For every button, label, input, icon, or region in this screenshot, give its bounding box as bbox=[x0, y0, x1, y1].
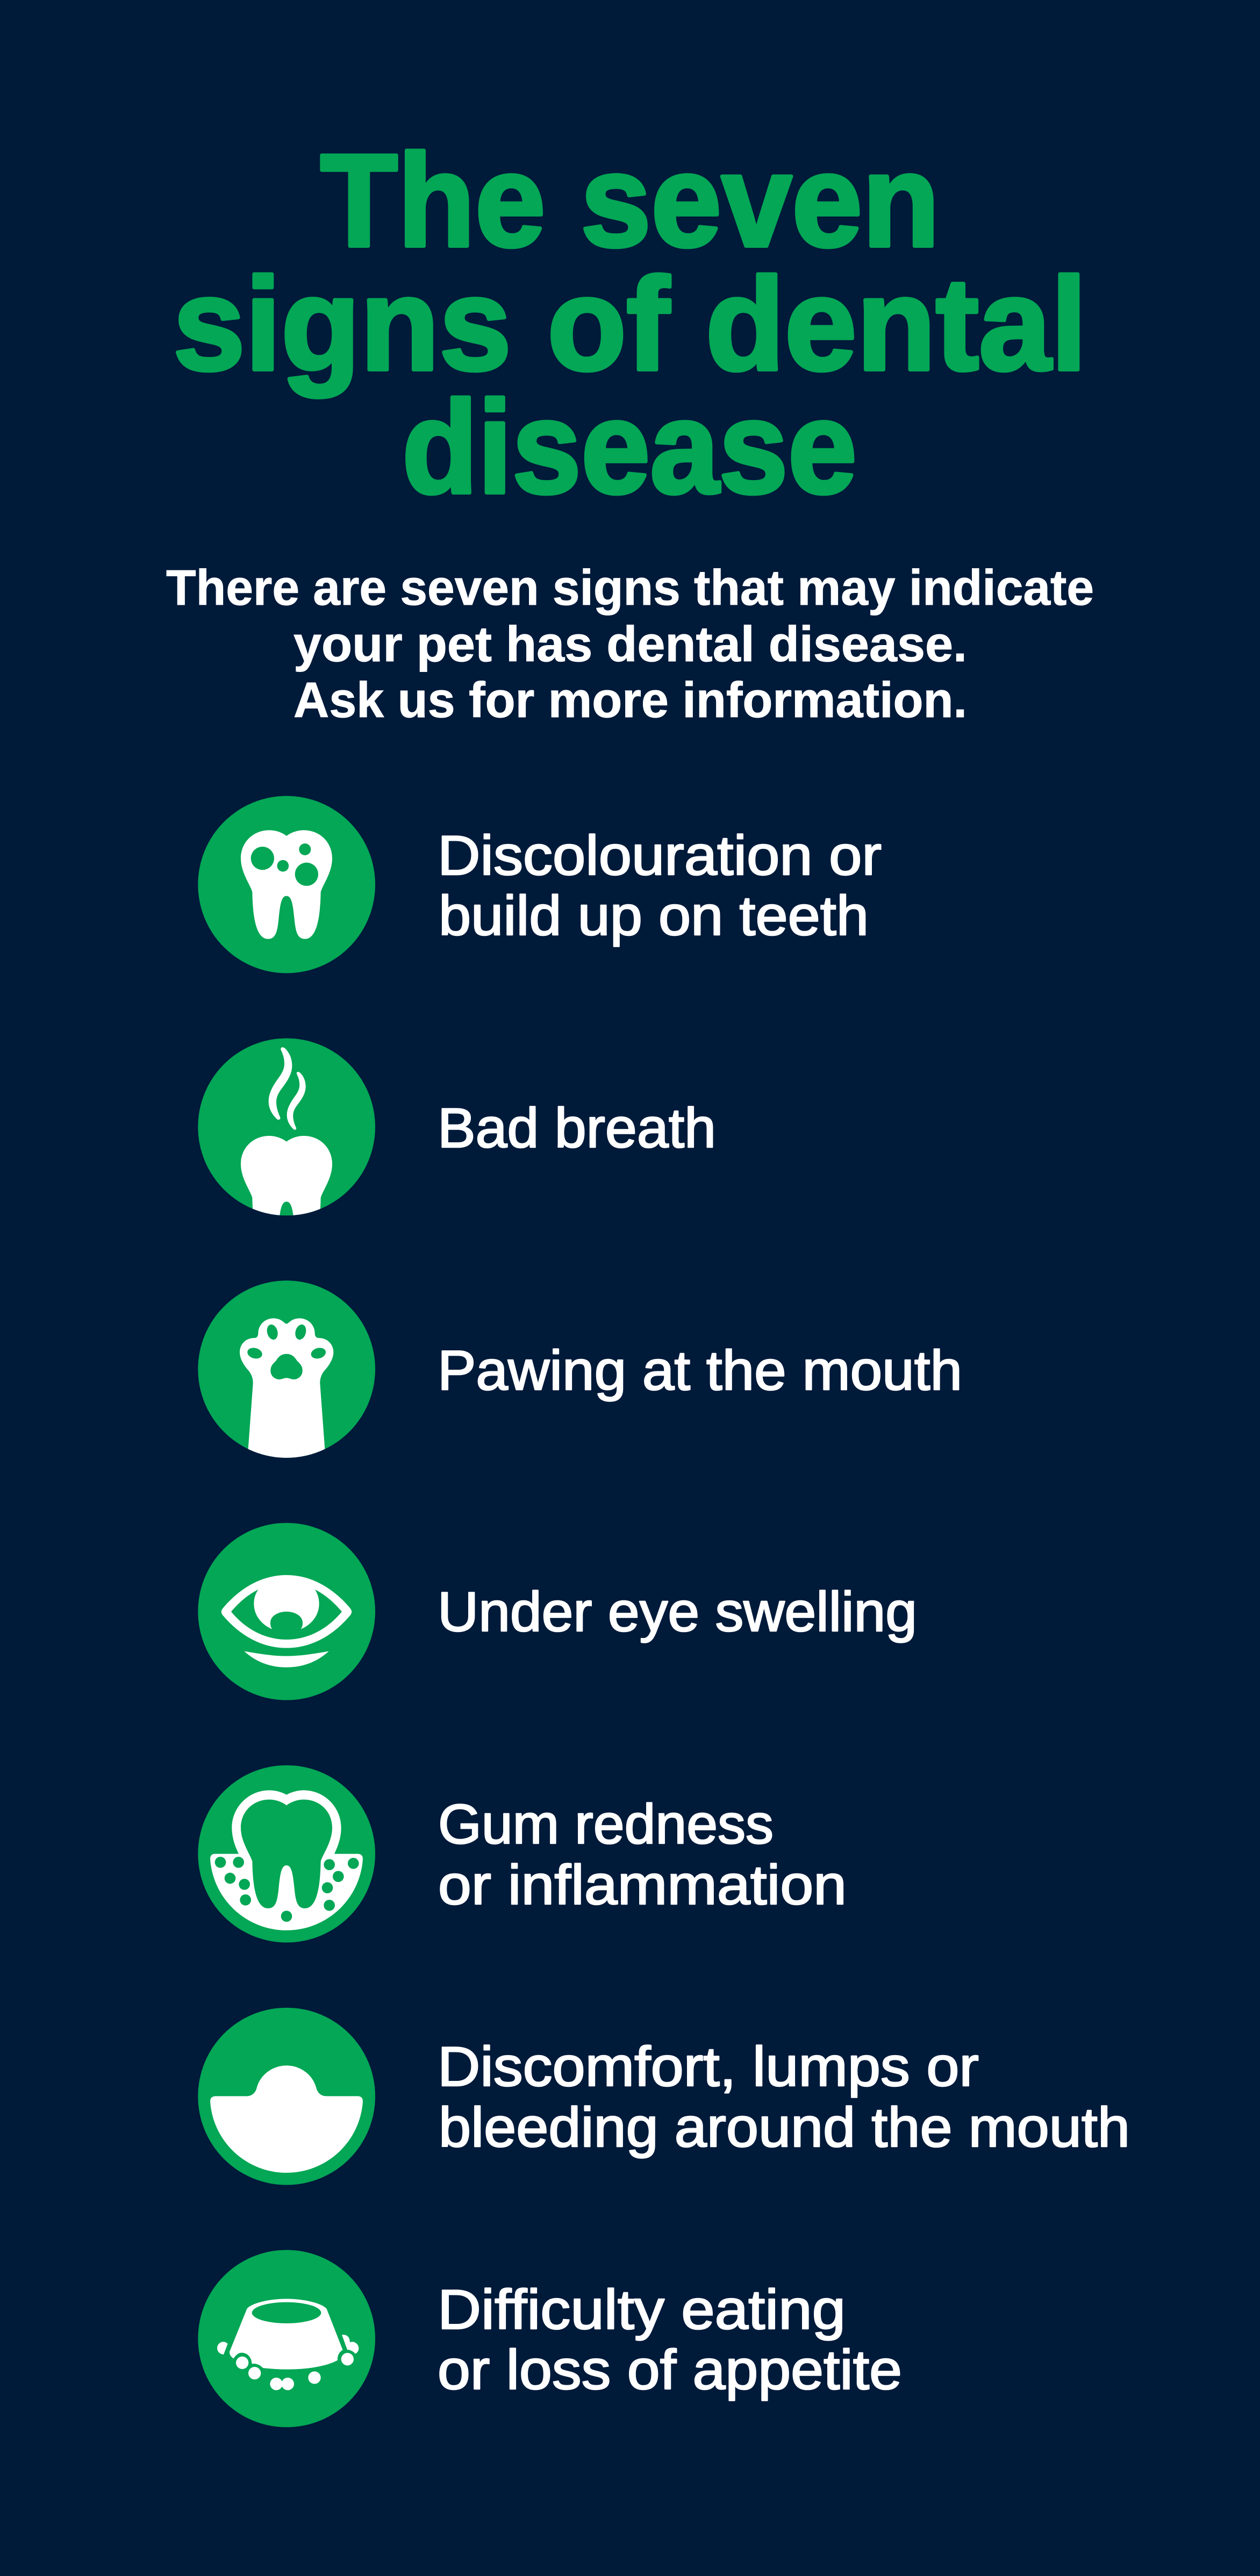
title: signs of dental bbox=[173, 251, 1087, 398]
icon: tooth with spots bbox=[198, 796, 375, 973]
intro text: your pet has dental disease. bbox=[293, 616, 967, 672]
intro text: There are seven signs that may indicate bbox=[166, 560, 1094, 616]
intro text: Ask us for more information. bbox=[293, 672, 967, 728]
icon: raised paw bbox=[198, 1280, 375, 1458]
title: The seven bbox=[320, 127, 940, 274]
label: discomfort: bleeding around the mouth bbox=[439, 2096, 1130, 2159]
label: discomfort: Discomfort, lumps or bbox=[438, 2036, 979, 2098]
icon: mouth lump bbox=[198, 2008, 375, 2185]
label: under eye swelling: Under eye swelling bbox=[438, 1581, 917, 1643]
panel: gum redness sign bbox=[198, 1765, 847, 1942]
label: discolouration: build up on teeth bbox=[439, 885, 869, 947]
panel: discomfort sign bbox=[198, 2008, 1130, 2185]
label: discolouration bbox=[438, 825, 882, 947]
label: bad breath: Bad breath bbox=[438, 1097, 716, 1160]
panel: discolouration sign bbox=[198, 796, 882, 973]
label: gum redness bbox=[438, 1793, 847, 1916]
title bbox=[173, 127, 1087, 520]
label: difficulty eating bbox=[438, 2279, 902, 2401]
panel: difficulty eating sign bbox=[198, 2250, 902, 2427]
label: difficulty eating: or loss of appetite bbox=[438, 2339, 902, 2401]
icon: tooth in inflamed gum bbox=[198, 1765, 375, 1942]
title: disease bbox=[402, 373, 857, 520]
icon: eye with swelling bbox=[198, 1523, 375, 1700]
panel: pawing sign bbox=[198, 1280, 962, 1458]
icon: food bowl with dropped kibble bbox=[198, 2250, 375, 2427]
label: gum redness: or inflammation bbox=[438, 1854, 847, 1916]
panel: under eye swelling sign bbox=[198, 1523, 917, 1700]
label: pawing: Pawing at the mouth bbox=[438, 1340, 962, 1402]
label: difficulty eating: Difficulty eating bbox=[438, 2279, 846, 2341]
label: discolouration: Discolouration or bbox=[438, 825, 882, 887]
label: gum redness: Gum redness bbox=[438, 1793, 774, 1856]
icon: tooth with odour bbox=[198, 1039, 375, 1216]
panel: bad breath sign bbox=[198, 1039, 713, 1216]
intro text bbox=[166, 560, 1094, 728]
label: discomfort bbox=[438, 2036, 1130, 2159]
